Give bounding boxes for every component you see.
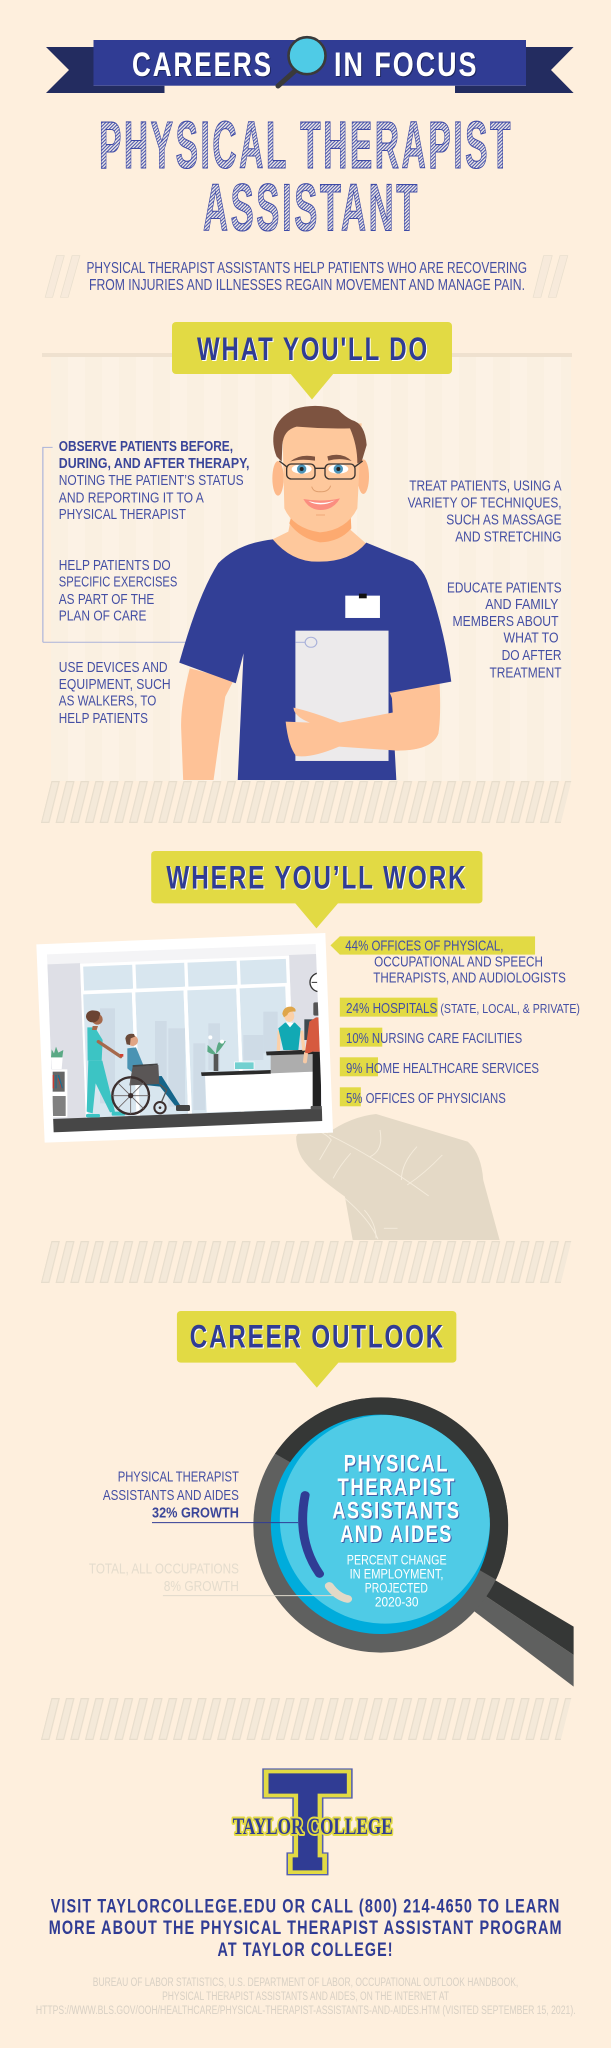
ribbon: careers in focus: IN FOCUS: [334, 46, 478, 84]
list: work settings: 24% HOSPITALS: [346, 1001, 437, 1017]
counter: [205, 1072, 317, 1112]
list: work settings: [330, 936, 580, 1107]
text: left duties: PLAN OF CARE: [59, 609, 147, 625]
text: lens label: AND AIDES: [340, 1521, 453, 1548]
text: left duties: SPECIFIC EXERCISES: [59, 575, 177, 591]
heading: career outlook: [177, 1311, 456, 1388]
room and windows: [47, 944, 322, 1119]
label: 32% growth: 32% GROWTH: [152, 1506, 239, 1522]
ribbon: careers in focus: [46, 37, 574, 93]
label: 32% growth: [103, 1469, 239, 1522]
title: [99, 108, 513, 246]
list: work settings: (STATE, LOCAL, & PRIVATE): [440, 1001, 580, 1016]
text: left duties: PHYSICAL THERAPIST: [59, 507, 186, 523]
text: left duties: AND REPORTING IT TO A: [59, 490, 204, 506]
call to action: AT TAYLOR COLLEGE!: [218, 1939, 394, 1961]
text: right duties: TREAT PATIENTS, USING A: [409, 479, 562, 495]
text: lens label: ASSISTANTS: [332, 1498, 461, 1525]
visitor: [304, 1019, 313, 1040]
illustration: hand holding photo: [296, 1114, 500, 1240]
text: left duties: USE DEVICES AND: [59, 660, 168, 676]
head: [270, 406, 369, 582]
label: 32% growth: PHYSICAL THERAPIST: [118, 1469, 239, 1485]
chart: magnifying glass radial: [152, 1397, 574, 1687]
text: right duties: TREATMENT: [490, 665, 562, 681]
text: right duties: VARIETY OF TECHNIQUES,: [408, 495, 562, 511]
text: lens label: PHYSICAL: [344, 1451, 449, 1478]
text: right duties: SUCH AS MASSAGE: [446, 512, 562, 528]
source note: PHYSICAL THERAPIST ASSISTANTS AND AIDES, ON THE INTERNET AT: [162, 1991, 449, 2003]
call to action: [49, 1896, 563, 1961]
divider 3: [41, 1698, 571, 1740]
text: lens label: THERAPIST: [338, 1474, 456, 1501]
city silhouettes: [100, 1008, 278, 1110]
list: work settings: 5% OFFICES OF PHYSICIANS: [346, 1091, 506, 1107]
divider 1: [41, 781, 571, 823]
heading: where you'll work: WHERE YOU’LL WORK: [166, 859, 468, 895]
ribbon: careers in focus: CAREERS: [132, 46, 273, 84]
list: work settings: OCCUPATIONAL AND SPEECH: [374, 955, 543, 971]
vase and tissue box: [214, 1054, 218, 1071]
text: left duties: EQUIPMENT, SUCH: [59, 677, 171, 693]
text: lens label: IN EMPLOYMENT,: [350, 1566, 444, 1582]
text: left duties: [59, 439, 249, 727]
text: right duties: WHAT TO: [504, 631, 558, 647]
text: right duties: [408, 479, 562, 681]
illustration: therapist: [43, 406, 451, 780]
panel: what you'll do background: [42, 353, 572, 781]
text: left duties: NOTING THE PATIENT’S STATUS: [59, 473, 244, 489]
mullions and floor: [47, 981, 329, 1136]
title: ASSISTANT: [203, 170, 420, 246]
text: left duties: HELP PATIENTS: [59, 711, 148, 727]
text: left duties: OBSERVE PATIENTS BEFORE,: [59, 439, 233, 455]
text: left duties: HELP PATIENTS DO: [59, 558, 171, 574]
list: work settings: 9% HOME HEALTHCARE SERVICES: [346, 1061, 539, 1077]
text: right duties: DO AFTER: [502, 648, 562, 664]
heading: what you'll do: [172, 322, 452, 400]
label: 8% growth: 8% GROWTH: [164, 1579, 239, 1595]
nurse: [87, 1061, 115, 1113]
shelf: [51, 1069, 67, 1117]
arc: 8% growth: [163, 1586, 348, 1599]
intro text with slashes: [45, 256, 568, 297]
text: right duties: MEMBERS ABOUT: [452, 614, 559, 630]
logo: taylor college: TAYLOR COLLEGE: [233, 1814, 393, 1839]
text: right duties: AND FAMILY: [485, 597, 559, 613]
text: lens label: PERCENT CHANGE: [347, 1552, 447, 1568]
label: 8% growth: TOTAL, ALL OCCUPATIONS: [89, 1561, 239, 1577]
list: work settings: THERAPISTS, AND AUDIOLOGISTS: [373, 971, 566, 987]
body and clipboard: [179, 539, 451, 780]
text: left duties: AS WALKERS, TO: [59, 694, 156, 710]
text: lens label: [332, 1451, 461, 1610]
arc: 32% growth: [152, 1495, 320, 1574]
text: left duties: DURING, AND AFTER THERAPY,: [59, 456, 249, 472]
receptionist: [278, 1031, 304, 1051]
label: 8% growth: [89, 1561, 239, 1595]
icon: magnifying glass: [278, 37, 326, 86]
photo: reception scene: [36, 933, 333, 1143]
text: right duties: EDUCATE PATIENTS: [447, 580, 562, 596]
heading: career outlook: CAREER OUTLOOK: [190, 1318, 445, 1354]
logo: taylor college: [233, 1768, 393, 1875]
text: right duties: AND STRETCHING: [455, 529, 562, 545]
list: work settings: 44% OFFICES OF PHYSICAL,: [345, 939, 504, 955]
text: left duties: AS PART OF THE: [59, 592, 155, 608]
heading: where you'll work: [151, 851, 482, 928]
list: work settings: 10% NURSING CARE FACILITIES: [346, 1031, 522, 1047]
clock: [309, 972, 318, 992]
text: lens label: PROJECTED: [365, 1580, 428, 1596]
text: lens label: 2020-30: [375, 1594, 419, 1610]
heading: what you'll do: WHAT YOU'LL DO: [197, 331, 429, 367]
source note: [36, 1977, 576, 2017]
label: 32% growth: ASSISTANTS AND AIDES: [103, 1488, 239, 1504]
divider 2: [41, 1241, 571, 1283]
patient in wheelchair: [145, 1076, 180, 1106]
